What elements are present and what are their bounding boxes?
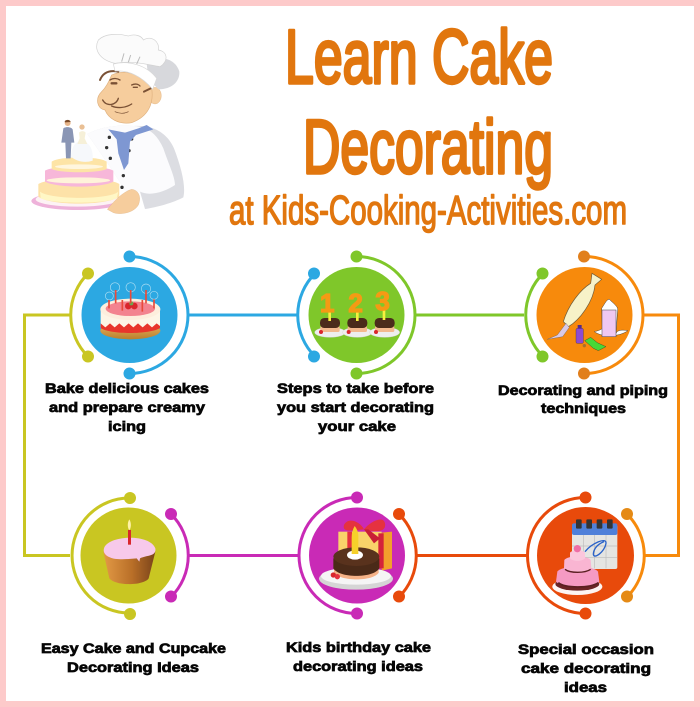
step 3 caption (498, 383, 668, 416)
icon: piping bag and supplies (547, 273, 628, 351)
title (229, 15, 627, 233)
cake plate (31, 192, 123, 210)
icon: numbered cupcakes: 1 (320, 288, 334, 318)
step 3 caption: Decorating and piping (498, 383, 668, 398)
cake tiers (38, 141, 119, 204)
step 5 node (299, 492, 416, 620)
icon: numbered cupcakes: 3 (375, 286, 390, 316)
step 4 caption (41, 641, 227, 675)
hand (107, 189, 140, 214)
step 6 caption: cake decorating (521, 661, 651, 676)
title: Decorating (303, 105, 553, 190)
step 6 node (528, 492, 644, 620)
step 4 caption: Easy Cake and Cupcake (41, 641, 227, 656)
illustration: chef holding wedding cake (31, 34, 184, 214)
step 3 node (526, 250, 643, 380)
step 1 node (71, 250, 188, 380)
step 6 caption (518, 642, 654, 695)
step 6 caption: Special occasion (518, 642, 654, 657)
icon: numbered cupcakes (315, 286, 400, 337)
step 2 caption: you start decorating (277, 400, 434, 415)
icon: birthday cake with gift (319, 519, 393, 590)
icon: calendar and tiered cake (552, 519, 617, 595)
step 4 node (72, 492, 188, 620)
step 3 caption: techniques (541, 401, 626, 416)
connector lines (24, 315, 678, 556)
step 1 caption: icing (108, 419, 146, 434)
step 6 caption: ideas (564, 680, 607, 695)
chef jacket (87, 126, 184, 209)
step 2 caption: your cake (318, 419, 397, 434)
groom figure (61, 120, 74, 158)
step 1 caption: Bake delicious cakes (45, 381, 209, 396)
chef hat (97, 34, 179, 89)
step 2 caption (277, 381, 435, 434)
step 1 caption (45, 381, 209, 434)
step 2 caption: Steps to take before (277, 381, 435, 396)
step 5 caption (286, 640, 432, 674)
ear (149, 87, 161, 104)
facial features (100, 71, 151, 113)
title: Learn Cake (285, 15, 553, 100)
icon: numbered cupcakes: 2 (348, 288, 363, 318)
step 5 caption: Kids birthday cake (286, 640, 432, 655)
step 4 caption: Decorating Ideas (67, 660, 199, 675)
step 2 node (298, 250, 415, 380)
bride figure (77, 124, 87, 144)
step 5 caption: decorating ideas (293, 659, 423, 674)
step 1 caption: and prepare creamy (49, 400, 206, 415)
icon: strawberry birthday cake (100, 283, 160, 339)
icon: cupcake with candle (103, 519, 155, 584)
neck tie (108, 125, 153, 170)
face (98, 72, 152, 123)
